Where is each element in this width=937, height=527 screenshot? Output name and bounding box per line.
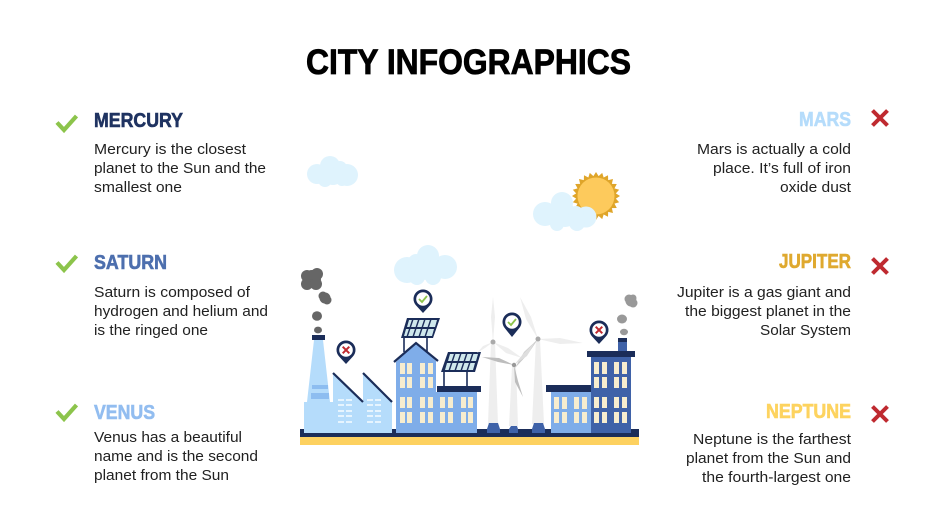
heading: Venus: VENUS [94, 402, 155, 424]
text: Mars description: Mars is actually a cold [697, 141, 851, 158]
icon: cross [872, 258, 888, 274]
text: Neptune description: Neptune is the farthest [693, 431, 852, 448]
icon: check [57, 256, 76, 270]
solar panels [401, 318, 481, 386]
text: Jupiter description: the biggest planet in the [685, 303, 851, 320]
text: Saturn description: hydrogen and helium and [94, 303, 268, 320]
icon: cross [872, 110, 888, 126]
text: Neptune description: planet from the Sun and [686, 450, 851, 467]
building centre [394, 343, 481, 433]
icon: check [57, 116, 76, 130]
heading: Jupiter: JUPITER [779, 251, 851, 273]
icon: check [57, 405, 76, 419]
heading: Saturn: SATURN [94, 252, 167, 274]
text: Venus description: name and is the second [94, 448, 258, 465]
icon: cloud centre [394, 245, 457, 285]
title: CITY INFOGRAPHICS [306, 43, 631, 82]
text: Venus description: planet from the Sun [94, 467, 229, 484]
icon: cross [872, 406, 888, 422]
icon: sun [572, 172, 620, 220]
icon: cloud left [307, 156, 358, 187]
text: Mercury description: smallest one [94, 179, 182, 196]
smoke right [617, 294, 638, 335]
panel: Venus [57, 402, 258, 484]
building right [546, 338, 635, 433]
text: Venus description: Venus has a beautiful [94, 429, 242, 446]
factory [304, 335, 392, 433]
heading: Mars: MARS [799, 109, 851, 131]
map pin: check, turbines [503, 312, 522, 337]
text: Mercury description [94, 141, 266, 196]
map pin: check, centre building [413, 289, 432, 313]
smoke left [301, 268, 332, 333]
panel: Mercury [57, 110, 266, 196]
text: Saturn description: Saturn is composed of [94, 284, 251, 301]
text: Mars description [697, 141, 852, 196]
text: Mars description: oxide dust [780, 179, 852, 196]
ground [300, 429, 639, 445]
panel: Jupiter [677, 251, 888, 339]
text: Neptune description: the fourth-largest one [702, 469, 851, 486]
text: Saturn description [94, 284, 268, 339]
panel: Neptune [686, 401, 888, 486]
wind turbines [477, 297, 583, 433]
panel: Mars [697, 109, 888, 196]
heading: Neptune: NEPTUNE [766, 401, 851, 423]
heading: Mercury: MERCURY [94, 110, 184, 132]
illustration: city [300, 156, 639, 445]
icon: cloud by sun [533, 192, 596, 231]
text: Saturn description: is the ringed one [94, 322, 208, 339]
text: Mercury description: planet to the Sun and the [94, 160, 266, 177]
map pin: cross, factory [336, 340, 355, 364]
text: Venus description [94, 429, 258, 484]
text: Jupiter description [677, 284, 851, 339]
panel: Saturn [57, 252, 268, 339]
text: Jupiter description: Jupiter is a gas giant and [677, 284, 851, 301]
map pin: cross, right building [590, 320, 608, 344]
text: Mercury description: Mercury is the closest [94, 141, 247, 158]
text: Mars description: place. It’s full of iron [713, 160, 851, 177]
text: Jupiter description: Solar System [760, 322, 851, 339]
text: Neptune description [686, 431, 852, 486]
